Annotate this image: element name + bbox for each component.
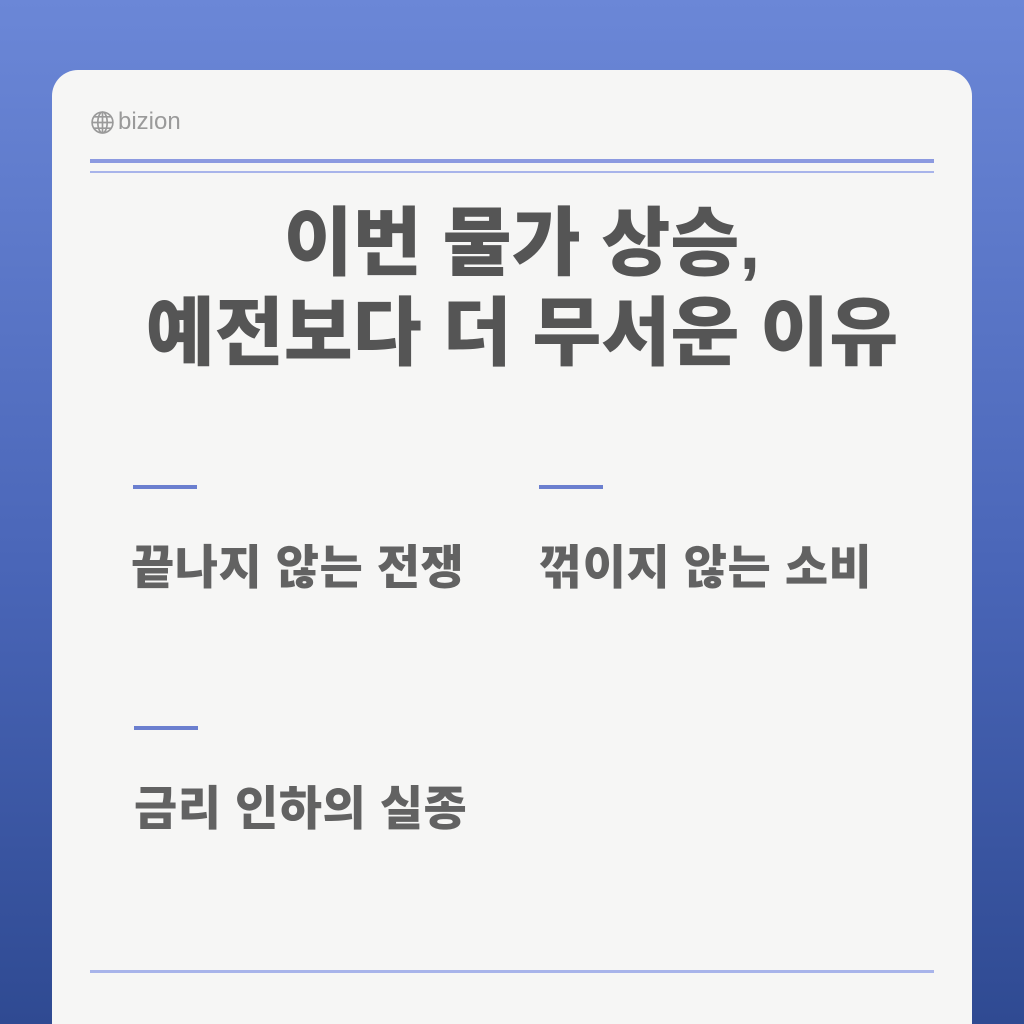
logo: bizion [118, 108, 181, 135]
title: 예전보다 더 무서운 이유 [146, 291, 898, 375]
item: war [131, 485, 464, 594]
bottom rule [90, 970, 934, 973]
item: consumption: 꺾이지 않는 소비 [539, 541, 872, 594]
logo [91, 108, 181, 135]
title: 이번 물가 상승, [284, 201, 760, 285]
title [146, 201, 898, 375]
item: rate cut: 금리 인하의 실종 [134, 782, 467, 835]
item: rate cut [134, 726, 467, 835]
item: consumption [539, 485, 872, 594]
item: war: 끝나지 않는 전쟁 [131, 541, 464, 594]
top rule [90, 159, 934, 163]
